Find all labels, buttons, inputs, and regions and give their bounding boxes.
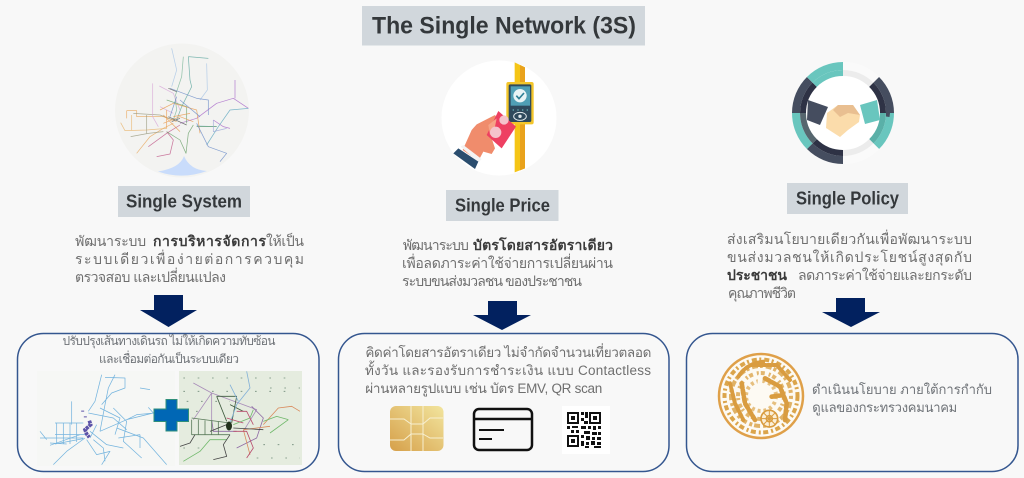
heading: single policy bbox=[787, 183, 908, 214]
text block: policy description: ประชาชน bbox=[727, 267, 787, 283]
icon: route map circle bbox=[115, 44, 249, 178]
heading: single policy: Single Policy bbox=[796, 188, 899, 208]
panel: single policy bbox=[686, 62, 1018, 472]
icon: EMV chip bbox=[390, 406, 444, 451]
text block: system description: ระบบเดียวเพื่อง่ายต่อการควบคุม bbox=[75, 250, 304, 268]
arrow: price down bbox=[473, 301, 531, 330]
text block: price detail: ผ่านหลายรูปแบบ เช่น บัตร EMV, QR scan bbox=[365, 381, 602, 397]
caption: system detail: ปรับปรุงเส้นทางเดินรถ ไม่ให้เกิดความทับซ้อน bbox=[62, 334, 276, 349]
heading: single system: Single System bbox=[126, 192, 242, 212]
icon: ministry seal bbox=[719, 354, 803, 438]
text block: policy description: ลดภาระค่าใช้จ่ายและยกระดับ bbox=[798, 267, 972, 283]
map: coloured routes bbox=[179, 371, 302, 465]
box: policy detail bbox=[686, 334, 1018, 472]
text block: policy detail bbox=[812, 382, 992, 416]
icon: card reader and hand bbox=[442, 60, 556, 176]
box: system detail bbox=[18, 334, 319, 472]
text block: price detail bbox=[365, 343, 651, 397]
text block: system description: พัฒนาระบบ bbox=[75, 233, 146, 249]
icon: card bbox=[474, 409, 532, 450]
text block: price description: เพื่อลดภาระค่าใช้จ่ายการเปลี่ยนผ่าน bbox=[402, 254, 613, 271]
box: price detail bbox=[338, 334, 669, 472]
text block: price description: ระบบขนส่งมวลชน ของประชาชน bbox=[402, 273, 582, 289]
arrow: system down bbox=[140, 295, 197, 327]
heading: single price: Single Price bbox=[455, 196, 550, 216]
text block: policy description: ขนส่งมวลชนให้เกิดประโยชน์สูงสุดกับ bbox=[727, 249, 972, 266]
text block: price detail: ทั้งวัน และรองรับการชำระเงิน แบบ Contactless bbox=[365, 360, 651, 378]
title: The Single Network (3S) bbox=[372, 12, 636, 40]
title bbox=[362, 6, 645, 46]
text block: price description: บัตรโดยสารอัตราเดียว bbox=[473, 236, 613, 253]
caption: system detail bbox=[62, 334, 276, 366]
panel: single system bbox=[18, 44, 319, 472]
heading: single price bbox=[446, 190, 558, 221]
panel: single price bbox=[338, 60, 669, 472]
text block: policy description: ส่งเสริมนโยบายเดียวกันเพื่อพัฒนาระบบ bbox=[727, 230, 972, 247]
text block: policy detail: ดูแลของกระทรวงคมนาคม bbox=[812, 400, 957, 416]
map: blue routes bbox=[37, 371, 175, 466]
arrow: policy down bbox=[822, 298, 880, 327]
text block: system description: ให้เป็น bbox=[266, 232, 304, 249]
icon: QR code bbox=[562, 406, 610, 454]
text block: system description: การบริหารจัดการ bbox=[153, 233, 266, 249]
text block: system description: ตรวจสอบ และเปลี่ยนแปลง bbox=[75, 268, 226, 285]
text block: price description: พัฒนาระบบ bbox=[403, 237, 469, 253]
caption: system detail: และเชื่อมต่อกันเป็นระบบเดียว bbox=[99, 350, 239, 366]
icon: plus bbox=[154, 400, 188, 431]
heading: single system bbox=[118, 186, 250, 217]
text block: policy detail: ดำเนินนโยบาย ภายใต้การกำกับ bbox=[812, 382, 992, 397]
text block: system description bbox=[75, 232, 304, 285]
text block: price description bbox=[402, 236, 613, 289]
icon: handshake ring bbox=[792, 62, 894, 164]
text block: policy description bbox=[727, 230, 972, 302]
text block: policy description: คุณภาพชีวิต bbox=[728, 285, 796, 302]
text block: price detail: คิดค่าโดยสารอัตราเดียว ไม่จำกัดจำนวนเที่ยวตลอด bbox=[365, 343, 651, 360]
